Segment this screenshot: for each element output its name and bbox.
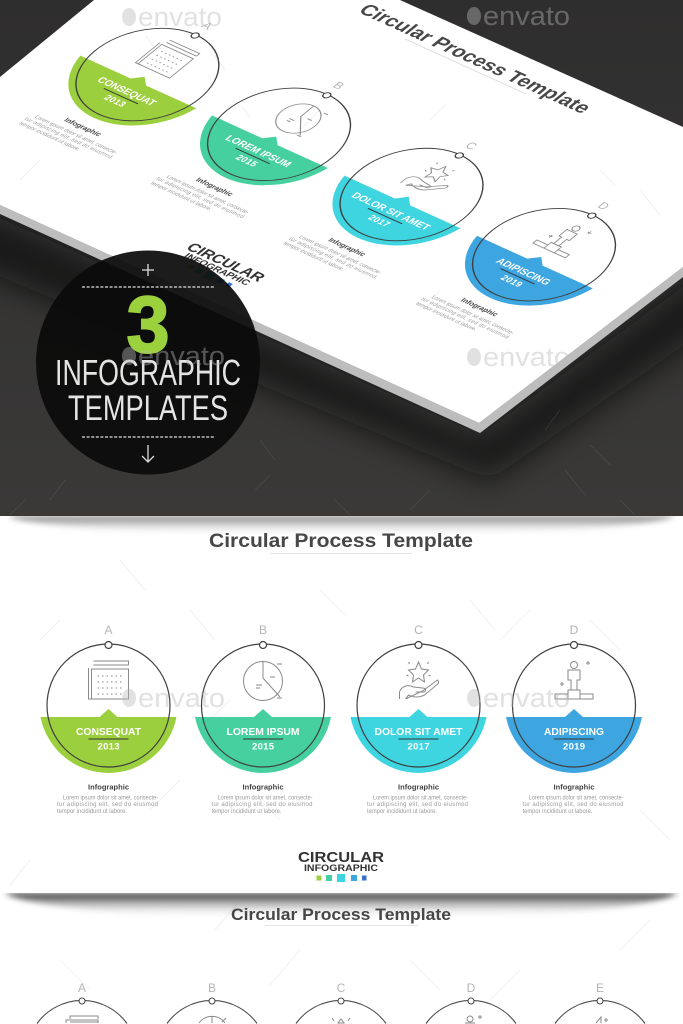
hero: tilted paper mockup: tur adipiscing elit, sed do eiusmod xyxy=(287,237,378,280)
hero: tilted paper mockup: Lorem ipsum dolor sit amet, consecte- xyxy=(164,175,250,215)
hero: tilted paper mockup: Infographic xyxy=(62,116,104,138)
step D: adipiscing 2019: D xyxy=(570,623,579,637)
section 3 heading: Circular Process Template xyxy=(231,906,451,924)
hero: tilted paper mockup: A xyxy=(198,20,216,32)
promo badge: 3 infographic templates xyxy=(36,250,260,474)
hero: tilted paper mockup xyxy=(0,0,683,480)
hero: tilted paper mockup: tur adipiscing elit, sed do eiusmod xyxy=(154,177,245,220)
hero: tilted paper mockup: 2015 xyxy=(233,153,260,168)
step B: lorem ipsum 2015: B xyxy=(259,623,267,637)
circular infographic logo: INFOGRAPHIC xyxy=(304,863,378,874)
step D: adipiscing 2019: Lorem ipsum dolor sit amet, consecte- xyxy=(528,796,624,802)
envato watermark, mid left: envato xyxy=(138,341,225,371)
step B: lorem ipsum 2015: Lorem ipsum dolor sit amet, consecte- xyxy=(218,796,312,802)
section 3: cropped five-step row xyxy=(37,981,645,1024)
step B: lorem ipsum 2015: 2015 xyxy=(252,742,275,752)
step B: lorem ipsum 2015: tur adipiscing elit, sed do eiusmod xyxy=(212,802,312,808)
number 3: 3 xyxy=(126,280,170,369)
step C: dolor sit amet 2017: Infographic xyxy=(398,782,439,792)
step D: adipiscing 2019 xyxy=(506,623,642,815)
step D: adipiscing 2019: Infographic xyxy=(554,782,594,792)
hero: tilted paper mockup: INFOGRAPHIC xyxy=(182,252,253,287)
hero: tilted paper mockup: tur adipiscing elit, sed do eiusmod xyxy=(419,297,510,340)
envato watermark, lower right: envato xyxy=(483,683,570,713)
section 3: cropped five-step row: C xyxy=(337,981,346,995)
hero: tilted paper mockup: Lorem ipsum dolor sit amet, consecte- xyxy=(429,295,515,336)
step C: dolor sit amet 2017 xyxy=(350,623,486,815)
shadow under section 2 xyxy=(4,893,680,914)
icon: person on podium xyxy=(555,661,593,699)
section 3: cropped five-step row: A xyxy=(78,981,86,995)
envato watermark, top left: envato xyxy=(138,2,222,32)
hero: tilted paper mockup: Lorem ipsum dolor sit amet, consecte- xyxy=(33,115,119,156)
step A: consequat 2013: tempor incididunt ut labore. xyxy=(57,809,127,815)
step A: consequat 2013: 2013 xyxy=(98,742,120,752)
step D: adipiscing 2019: tur adipiscing elit, sed do eiusmod xyxy=(522,802,624,808)
step A: consequat 2013: Lorem ipsum dolor sit amet, consecte- xyxy=(63,796,158,802)
hero: tilted paper mockup: C xyxy=(462,140,480,152)
hero: tilted paper mockup: Infographic xyxy=(194,176,236,198)
hero: tilted paper mockup: Infographic xyxy=(459,296,501,318)
step B: lorem ipsum 2015: tempor incididunt ut labore. xyxy=(212,809,282,815)
step A: consequat 2013: CONSEQUAT xyxy=(76,726,142,738)
section 3: cropped five-step row: B xyxy=(208,981,216,995)
hero: tilted paper mockup: tur adipiscing elit, sed do eiusmod xyxy=(23,117,113,160)
step C: dolor sit amet 2017: 2017 xyxy=(408,742,430,752)
section 3: cropped five-step row: E xyxy=(596,981,604,995)
step A: consequat 2013: tur adipiscing elit, sed do eiusmod xyxy=(57,802,158,808)
hero: tilted paper mockup: CIRCULAR xyxy=(182,241,269,285)
upper dashed line xyxy=(82,286,214,288)
step C: dolor sit amet 2017: tempor incididunt ut labore. xyxy=(367,809,437,815)
shadow under hero xyxy=(8,516,675,532)
icon: hand with star xyxy=(400,662,439,699)
envato watermark, mid right: envato xyxy=(483,342,570,372)
step A: consequat 2013: Infographic xyxy=(88,782,129,792)
TEMPLATES heading: TEMPLATES xyxy=(68,389,228,428)
hero: tilted paper mockup: ADIPISCING xyxy=(493,257,553,287)
step B: lorem ipsum 2015: LOREM IPSUM xyxy=(226,726,300,738)
dark textured hero background xyxy=(0,0,683,516)
section 2 heading: Circular Process Template xyxy=(209,530,473,552)
step D: adipiscing 2019: tempor incididunt ut labore. xyxy=(522,809,593,815)
hero: tilted paper mockup: DOLOR SIT AMET xyxy=(348,191,433,233)
envato watermark, lower left: envato xyxy=(138,683,225,713)
hero: tilted paper mockup: 2013 xyxy=(102,93,128,108)
hero: tilted paper mockup: Circular Process Template xyxy=(353,1,596,117)
hero: tilted paper mockup: LOREM IPSUM xyxy=(222,134,293,169)
step C: dolor sit amet 2017: tur adipiscing elit, sed do eiusmod xyxy=(367,802,468,808)
envato watermark, top right: envato xyxy=(483,1,570,31)
step D: adipiscing 2019: 2019 xyxy=(563,742,585,752)
INFOGRAPHIC heading: INFOGRAPHIC xyxy=(55,352,241,393)
hero: tilted paper mockup: Lorem ipsum dolor sit amet, consecte- xyxy=(297,235,383,276)
step C: dolor sit amet 2017: Lorem ipsum dolor sit amet, consecte- xyxy=(373,796,468,802)
hero: tilted paper mockup: D xyxy=(594,200,612,212)
hero: tilted paper mockup: B xyxy=(330,80,347,92)
icon: calendar xyxy=(88,661,128,699)
circular infographic logo xyxy=(298,849,384,882)
hero: tilted paper mockup: 2019 xyxy=(498,274,525,289)
step B: lorem ipsum 2015 xyxy=(195,623,331,815)
step A: consequat 2013 xyxy=(40,623,176,815)
circular infographic logo: CIRCULAR xyxy=(298,849,384,866)
step C: dolor sit amet 2017: DOLOR SIT AMET xyxy=(374,726,463,738)
section 3: cropped five-step row: D xyxy=(467,981,476,995)
step C: dolor sit amet 2017: C xyxy=(414,623,423,637)
lower dashed line xyxy=(82,436,214,438)
hero: tilted paper mockup: tempor incididunt ut labore. xyxy=(414,301,478,333)
icon: pie chart xyxy=(244,661,282,700)
down arrow xyxy=(142,445,154,462)
step B: lorem ipsum 2015: Infographic xyxy=(242,782,284,792)
step A: consequat 2013: A xyxy=(104,623,113,637)
hero: tilted paper mockup: 2017 xyxy=(366,213,393,228)
hero: tilted paper mockup: CONSEQUAT xyxy=(94,76,159,108)
plus icon xyxy=(142,264,154,276)
partial icons xyxy=(66,1015,608,1023)
hero: tilted paper mockup: tempor incididunt ut labore. xyxy=(281,241,346,272)
hero: tilted paper mockup: tempor incididunt ut labore. xyxy=(17,121,82,152)
hero: tilted paper mockup: tempor incididunt ut labore. xyxy=(149,181,213,212)
step D: adipiscing 2019: ADIPISCING xyxy=(544,726,604,738)
hero: tilted paper mockup: Infographic xyxy=(326,236,368,258)
